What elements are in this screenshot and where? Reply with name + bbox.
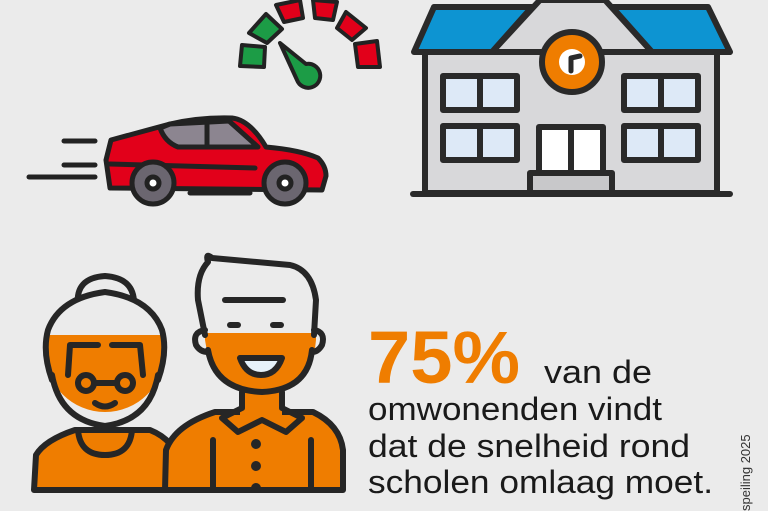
description text (368, 354, 713, 500)
description text: van de (544, 354, 652, 390)
woman (34, 430, 180, 490)
icon: school (413, 0, 730, 194)
stat number 75%: 75% (368, 316, 520, 399)
description text: omwonenden vindt (368, 391, 662, 427)
description text: dat de snelheid rond (368, 428, 690, 464)
icon: elderly couple (34, 256, 343, 490)
source note: speiling 2025 (738, 434, 753, 511)
man (165, 412, 343, 490)
icon: car (29, 118, 326, 204)
description text: scholen omlaag moet. (368, 464, 713, 500)
icon: speedometer (240, 0, 380, 88)
